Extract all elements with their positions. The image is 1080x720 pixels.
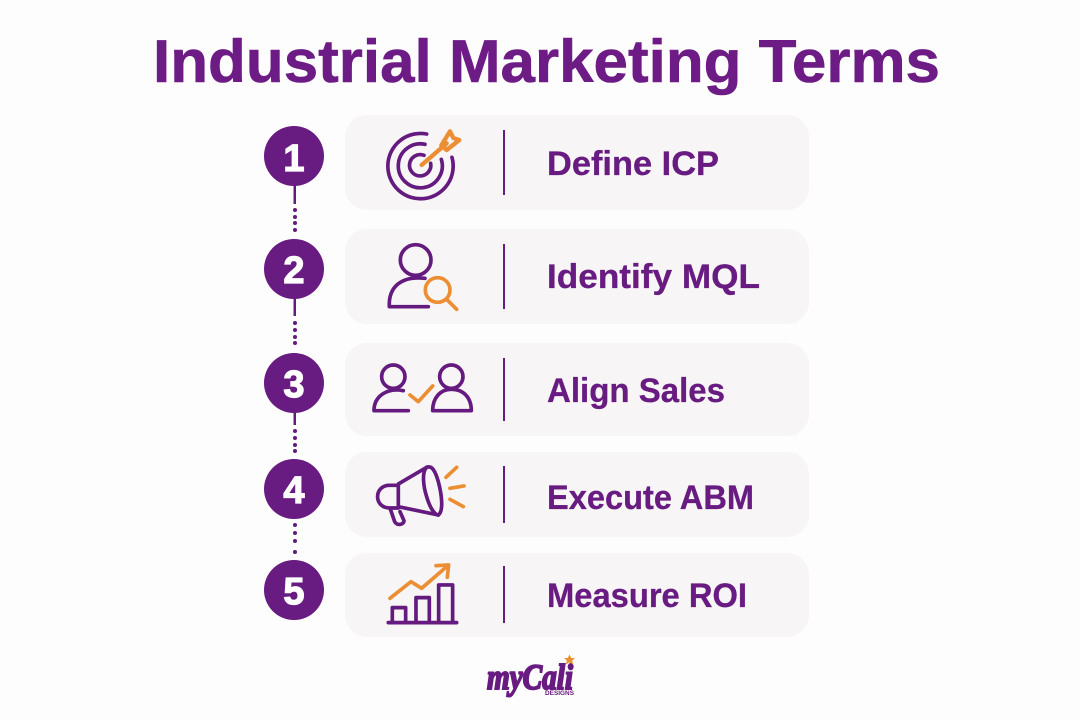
number badge 5 (264, 560, 324, 620)
card 4 (345, 452, 809, 537)
label: Execute ABM (547, 479, 754, 517)
card 2 (345, 229, 809, 324)
label: Identify MQL (547, 258, 760, 296)
number badge 2: 2 (283, 250, 305, 292)
label: Align Sales (547, 372, 725, 410)
number badge 2 (264, 239, 324, 299)
number badge 4: 4 (283, 470, 305, 512)
logo: myCali (487, 657, 573, 697)
icon: two people with check (374, 365, 471, 411)
card 5 (345, 553, 809, 637)
divider (503, 130, 505, 195)
number badge 5: 5 (283, 571, 305, 613)
step 1: define ICP (264, 115, 809, 210)
step 3: align sales (264, 343, 809, 436)
divider (503, 466, 505, 523)
number badge 1 (264, 126, 324, 186)
label: Define ICP (547, 145, 719, 183)
title: Industrial Marketing Terms (153, 28, 940, 95)
number badge 3: 3 (283, 364, 305, 406)
logo: DESIGNS (545, 690, 575, 697)
step 2: identify MQL (264, 229, 809, 324)
divider (503, 244, 505, 309)
step 5: measure ROI (264, 553, 809, 637)
number badge 1: 1 (283, 138, 305, 180)
card 1 (345, 115, 809, 210)
icon: megaphone (378, 467, 464, 524)
timeline connector (293, 184, 297, 554)
icon: target with arrow (388, 131, 459, 199)
number badge 3 (264, 353, 324, 413)
step 4: execute ABM (264, 452, 809, 537)
card 3 (345, 343, 809, 436)
label: Measure ROI (547, 577, 747, 615)
icon: growth chart (388, 565, 457, 623)
icon: person with magnifier (389, 245, 457, 309)
divider (503, 358, 505, 421)
divider (503, 566, 505, 623)
number badge 4 (264, 459, 324, 519)
